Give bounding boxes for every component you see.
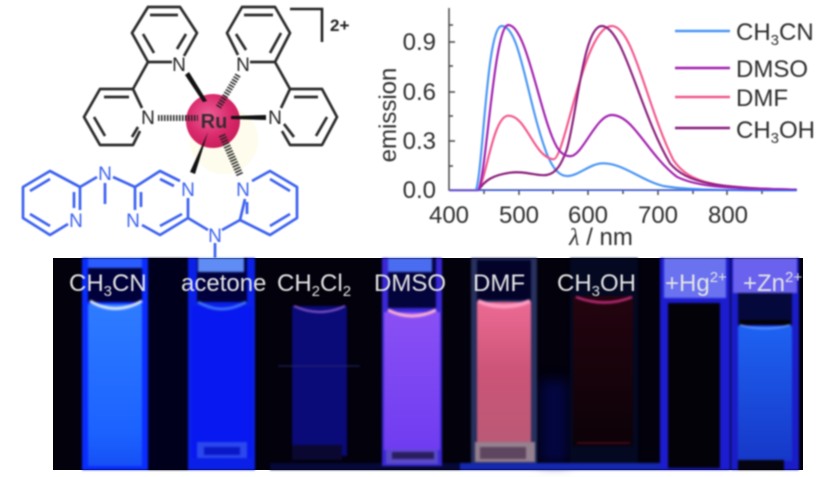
vial: DMF <box>471 258 537 463</box>
y tick labels <box>403 29 436 204</box>
axes <box>449 8 797 195</box>
x tick labels: 700 <box>638 202 678 229</box>
bipyridine ligand right: N <box>236 55 250 76</box>
Ru label: Ru <box>201 111 227 133</box>
vial: CH3CN <box>82 258 148 470</box>
vial labels: CH <box>69 270 104 297</box>
y tick labels: 0.0 <box>403 177 436 204</box>
vial: CH3OH <box>570 258 638 463</box>
x tick labels: 500 <box>499 202 539 229</box>
coordination bonds <box>158 72 266 175</box>
vial labels: DMSO <box>374 270 446 297</box>
vial labels <box>69 269 802 300</box>
y axis title: emission <box>375 68 402 162</box>
y tick labels: 0.3 <box>403 128 436 155</box>
vial: +Hg2+ <box>660 258 730 470</box>
y tick labels: 0.9 <box>403 29 436 56</box>
legend: CH3CN: CH <box>736 19 771 46</box>
blue ligand <box>23 164 297 258</box>
vial labels: CH <box>557 270 592 297</box>
metal centre halo <box>190 106 258 174</box>
baseline <box>449 188 797 192</box>
legend: CH3OH <box>675 117 815 147</box>
x tick labels: 600 <box>568 202 608 229</box>
spectrum curves <box>449 25 797 190</box>
vial labels: 3 <box>104 283 112 300</box>
legend: DMSO: DMSO <box>736 56 808 83</box>
charge bracket <box>290 9 322 42</box>
legend <box>675 19 815 147</box>
legend: CH3OH: 3 <box>771 130 779 147</box>
bipyridine ligand left: N <box>141 108 155 129</box>
legend: DMF: DMF <box>736 85 788 112</box>
x tick labels <box>429 202 748 229</box>
bipyridine ligand left <box>84 7 197 145</box>
vial labels: CN <box>112 270 147 297</box>
bipyridine ligand left: N <box>172 55 186 76</box>
legend: CH3CN: CN <box>779 19 814 46</box>
blue ligand: N <box>69 211 83 232</box>
x tick labels: 800 <box>708 202 748 229</box>
curve: DMSO <box>478 25 797 190</box>
blue ligand: N <box>98 164 112 185</box>
bipyridine ligand right: N <box>268 108 282 129</box>
vial labels: 3 <box>592 283 600 300</box>
vial labels: OH <box>600 270 636 297</box>
curve: CH3OH <box>478 26 797 190</box>
x axis title: λ / nm <box>568 224 633 251</box>
legend: CH3CN: 3 <box>771 32 779 49</box>
vial labels: 2+ <box>710 269 727 286</box>
photo panel: vials under UV <box>53 258 803 470</box>
blue ligand: N <box>126 211 140 232</box>
bipyridine ligand right <box>227 7 337 145</box>
molecular structure: Ru complex <box>23 7 349 258</box>
photo background <box>53 258 803 470</box>
blue ligand: N <box>181 180 195 201</box>
vial labels: 2+ <box>785 269 802 286</box>
charge label: 2+ <box>330 16 349 35</box>
vial labels: Cl <box>320 270 343 297</box>
vial labels: DMF <box>473 270 525 297</box>
legend: DMF <box>675 85 788 112</box>
legend: CH3CN <box>675 19 814 49</box>
vial labels: acetone <box>181 270 266 297</box>
emission spectrum chart <box>375 8 815 251</box>
vial: CH2Cl2 <box>278 306 360 460</box>
vial: DMSO <box>382 258 442 466</box>
legend: DMSO <box>675 56 808 83</box>
ruthenium sphere <box>186 94 240 148</box>
vial labels: +Hg <box>665 270 710 297</box>
vial labels: +Zn <box>743 270 785 297</box>
vial labels: 2 <box>343 283 351 300</box>
curve: DMF <box>449 26 797 190</box>
blue ligand: N <box>208 226 222 247</box>
blue ligand: N <box>236 180 250 201</box>
vial: acetone <box>188 258 255 470</box>
vial labels: CH <box>277 270 312 297</box>
legend: CH3OH: CH <box>736 117 771 144</box>
legend: CH3OH: OH <box>779 117 815 144</box>
vial labels: 2 <box>312 283 320 300</box>
vial: +Zn2+ <box>731 258 799 470</box>
photo artwork <box>82 258 799 470</box>
x tick labels: 400 <box>429 202 469 229</box>
y tick labels: 0.6 <box>403 79 436 106</box>
curve: CH3CN <box>449 26 797 190</box>
